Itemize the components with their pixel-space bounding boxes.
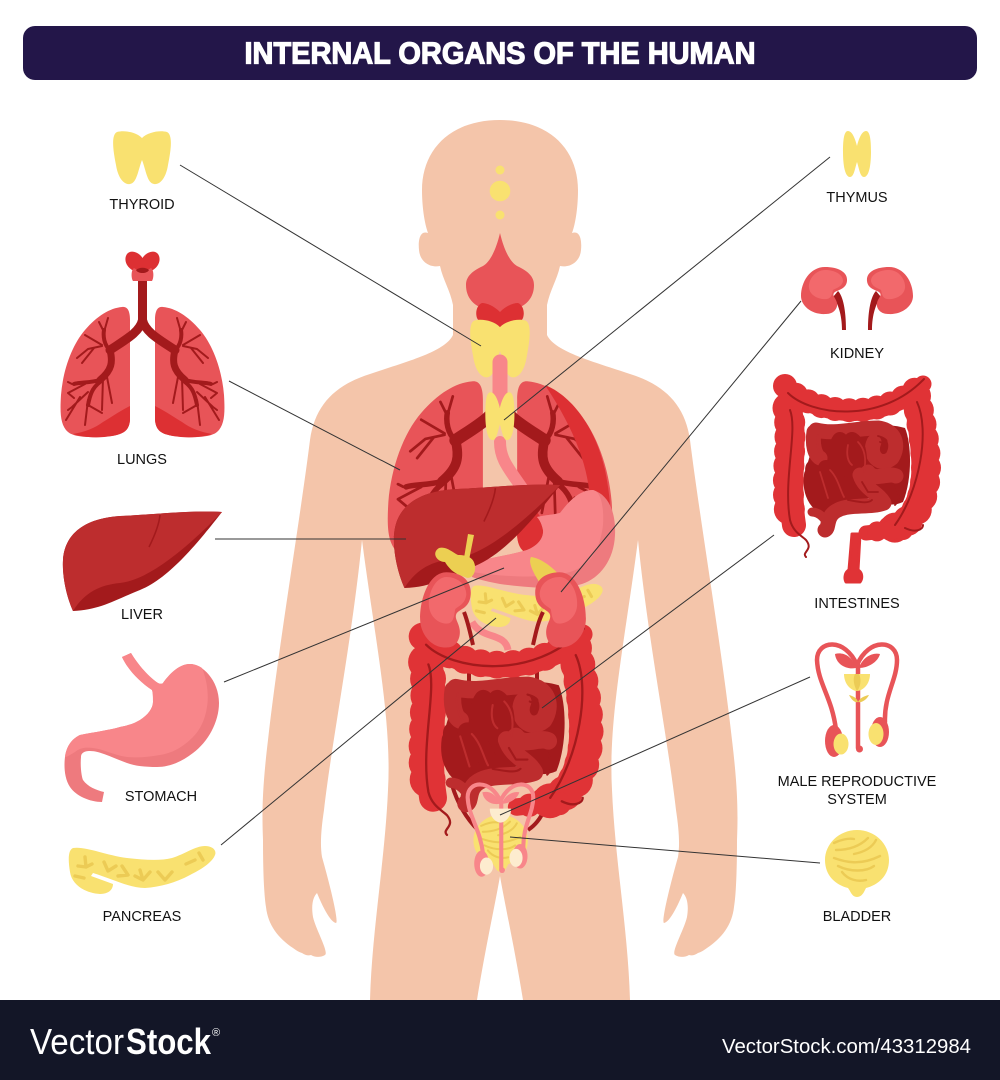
- central small intestine: [443, 682, 565, 804]
- central thyroid: [470, 320, 530, 377]
- label: pancreas: PANCREAS: [103, 909, 181, 925]
- icon: stomach: [65, 653, 219, 802]
- icon: kidney: [801, 267, 913, 330]
- footer watermark bar: VectorStock.com/43312984: [722, 1036, 971, 1058]
- icon: intestines: [785, 379, 926, 582]
- head glands: [490, 166, 510, 220]
- central bladder: [473, 815, 528, 872]
- icon: lungs: [61, 252, 224, 437]
- label: male reproductive system: MALE REPRODUCTIVE: [778, 774, 937, 790]
- nasal and throat organ: [466, 233, 534, 338]
- label: liver: LIVER: [121, 607, 163, 623]
- label: stomach: STOMACH: [125, 789, 197, 805]
- footer watermark bar: Vector: [30, 1021, 124, 1062]
- pink small tube: [472, 622, 508, 650]
- label: kidney: KIDNEY: [830, 346, 884, 362]
- label: intestines: INTESTINES: [814, 596, 900, 612]
- gallbladder and bile duct: [435, 534, 562, 586]
- central kidneys: [420, 572, 586, 648]
- label: thymus: THYMUS: [826, 190, 888, 206]
- central liver: [394, 485, 560, 588]
- body silhouette: [263, 120, 737, 1000]
- icon: liver: [63, 512, 222, 611]
- label: male reproductive system: [778, 774, 937, 808]
- central pancreas: [471, 584, 603, 627]
- label: thyroid: THYROID: [109, 197, 175, 213]
- icon: thymus: [843, 131, 871, 177]
- leader lines: [180, 157, 830, 863]
- central thymus: [485, 392, 514, 440]
- footer watermark bar: ®: [212, 1027, 220, 1039]
- label: bladder: BLADDER: [823, 909, 891, 925]
- title banner: INTERNAL ORGANS OF THE HUMAN: [244, 36, 756, 70]
- central lungs: [388, 381, 612, 560]
- icon: bladder: [825, 830, 889, 897]
- outer shading of right lung: [545, 385, 610, 530]
- central stomach: [472, 490, 615, 588]
- label: male reproductive system: SYSTEM: [827, 792, 887, 808]
- central reproductive system: [468, 784, 533, 877]
- footer watermark bar: [0, 1000, 1000, 1080]
- label: lungs: LUNGS: [117, 452, 167, 468]
- esophagus: [500, 362, 522, 488]
- ureters in the body: [452, 612, 544, 830]
- icon: pancreas: [69, 846, 215, 894]
- icon: male reproductive system: [817, 644, 897, 757]
- icon: thyroid: [113, 131, 171, 184]
- footer watermark bar: Stock: [126, 1021, 212, 1062]
- central large intestine: [423, 628, 586, 835]
- title banner: [23, 26, 977, 80]
